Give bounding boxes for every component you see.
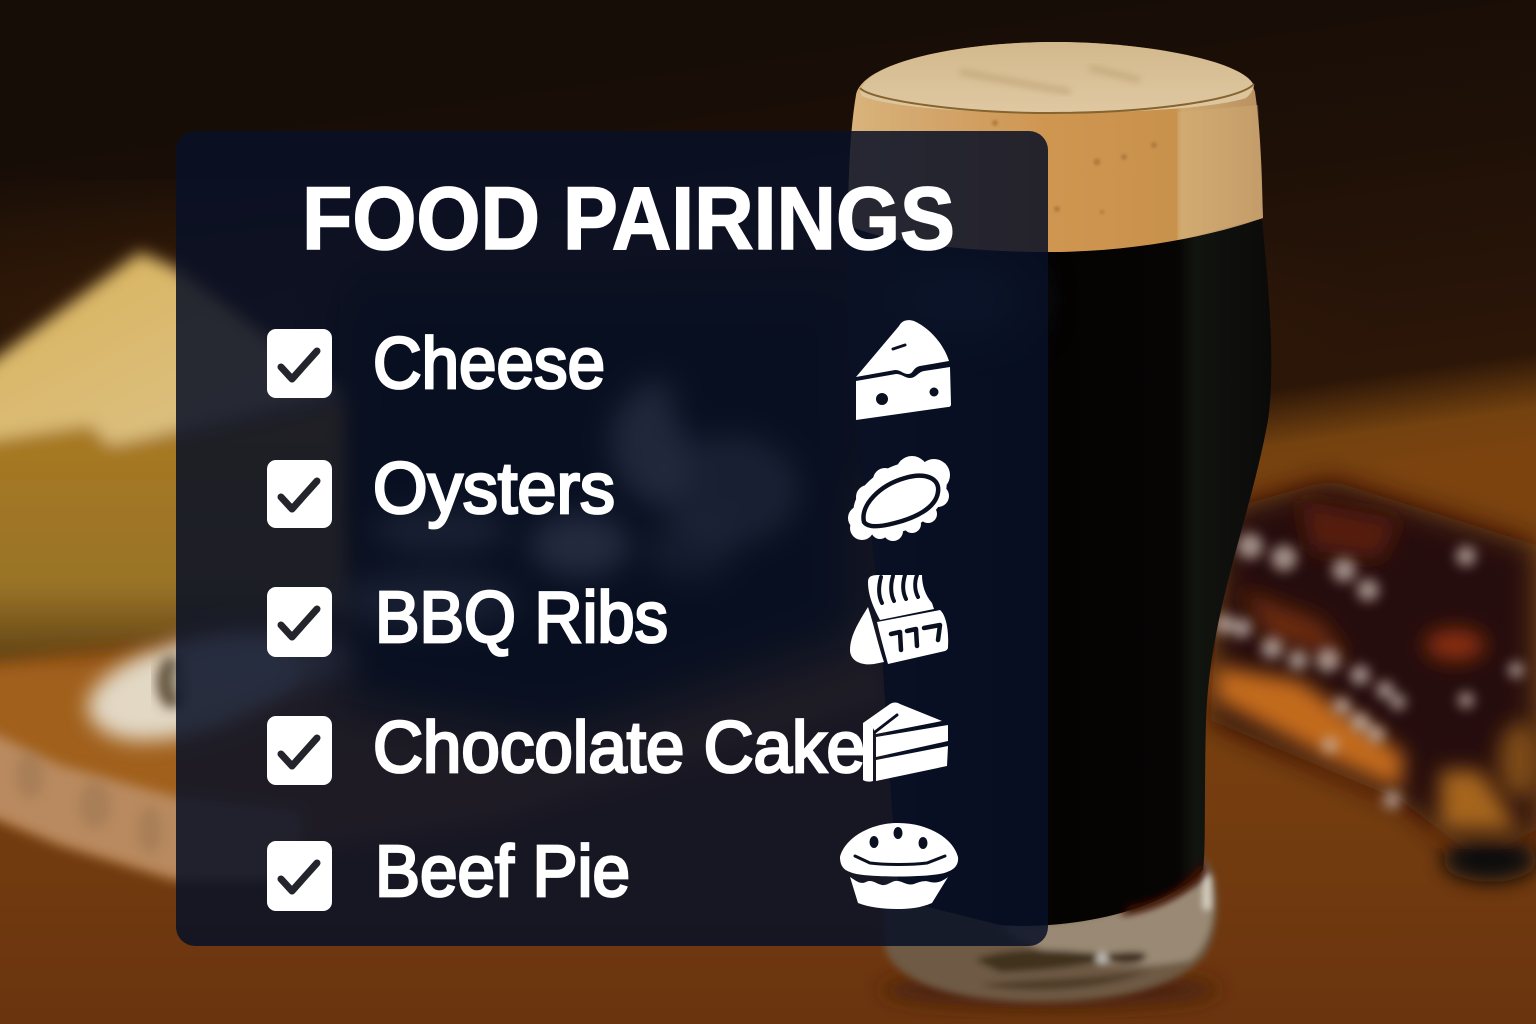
BBQ ribs: [1210, 480, 1536, 882]
label: Beef Pie: [375, 832, 630, 912]
label: Oysters: [373, 449, 615, 529]
glass of stout: [846, 42, 1271, 1008]
icon: cheese wedge: [856, 320, 951, 420]
translucent panel: [176, 131, 1048, 946]
label: BBQ Ribs: [375, 578, 668, 658]
icon: pie: [840, 823, 958, 909]
checkbox: [267, 841, 332, 911]
dark scene behind oysters: [340, 280, 860, 740]
checkbox: [267, 460, 332, 528]
label: Chocolate Cake: [373, 708, 865, 788]
cheese wedge: [0, 252, 345, 662]
checkbox: [267, 587, 332, 657]
row: cheese: [267, 320, 951, 420]
checkbox: [267, 716, 332, 785]
row: BBQ ribs: [267, 575, 948, 664]
icon: ribs: [850, 575, 948, 664]
icon: cake slice: [863, 702, 948, 782]
label: Cheese: [373, 324, 605, 404]
glass base: [880, 972, 1220, 1008]
foam head: [848, 42, 1263, 252]
wooden board: [0, 610, 890, 870]
icon: oyster shell: [841, 446, 959, 550]
row: oysters: [267, 446, 959, 550]
oysters: [88, 379, 800, 741]
checkbox: [267, 329, 332, 398]
row: chocolate cake: [267, 702, 948, 788]
row: beef pie: [267, 823, 958, 912]
stout body: [846, 220, 1271, 926]
title: FOOD PAIRINGS: [302, 168, 955, 268]
